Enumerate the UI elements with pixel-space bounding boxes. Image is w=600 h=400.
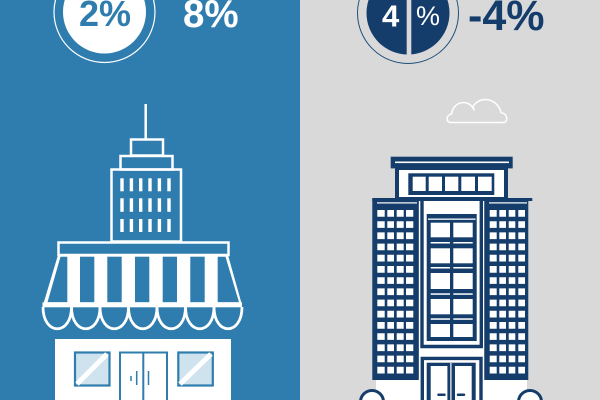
right percentage badge <box>358 0 458 64</box>
awning scallops <box>43 307 242 329</box>
shrub left <box>360 390 384 400</box>
right percentage badge: % <box>416 1 440 31</box>
building lower white body <box>376 378 527 400</box>
shop door <box>120 352 167 400</box>
icon: cloud <box>447 99 507 122</box>
left percentage badge <box>54 0 155 62</box>
building left wing <box>372 198 419 380</box>
building upper storey <box>397 168 506 199</box>
building entrance doors <box>422 358 481 400</box>
building roof cap <box>391 157 513 168</box>
shrub right <box>518 390 542 400</box>
panel: right grey background <box>300 0 600 400</box>
icon: shop awning <box>42 242 242 329</box>
icon: shop front <box>55 339 231 400</box>
tower windows <box>120 178 171 232</box>
building centre window column <box>422 200 481 346</box>
icon: office building <box>360 157 542 400</box>
shop window right <box>178 352 213 386</box>
icon: tower behind shop <box>112 104 181 242</box>
building right wing <box>484 198 528 380</box>
building centre body <box>419 198 484 400</box>
panel: left blue background <box>0 0 300 400</box>
shop window left <box>75 352 110 386</box>
